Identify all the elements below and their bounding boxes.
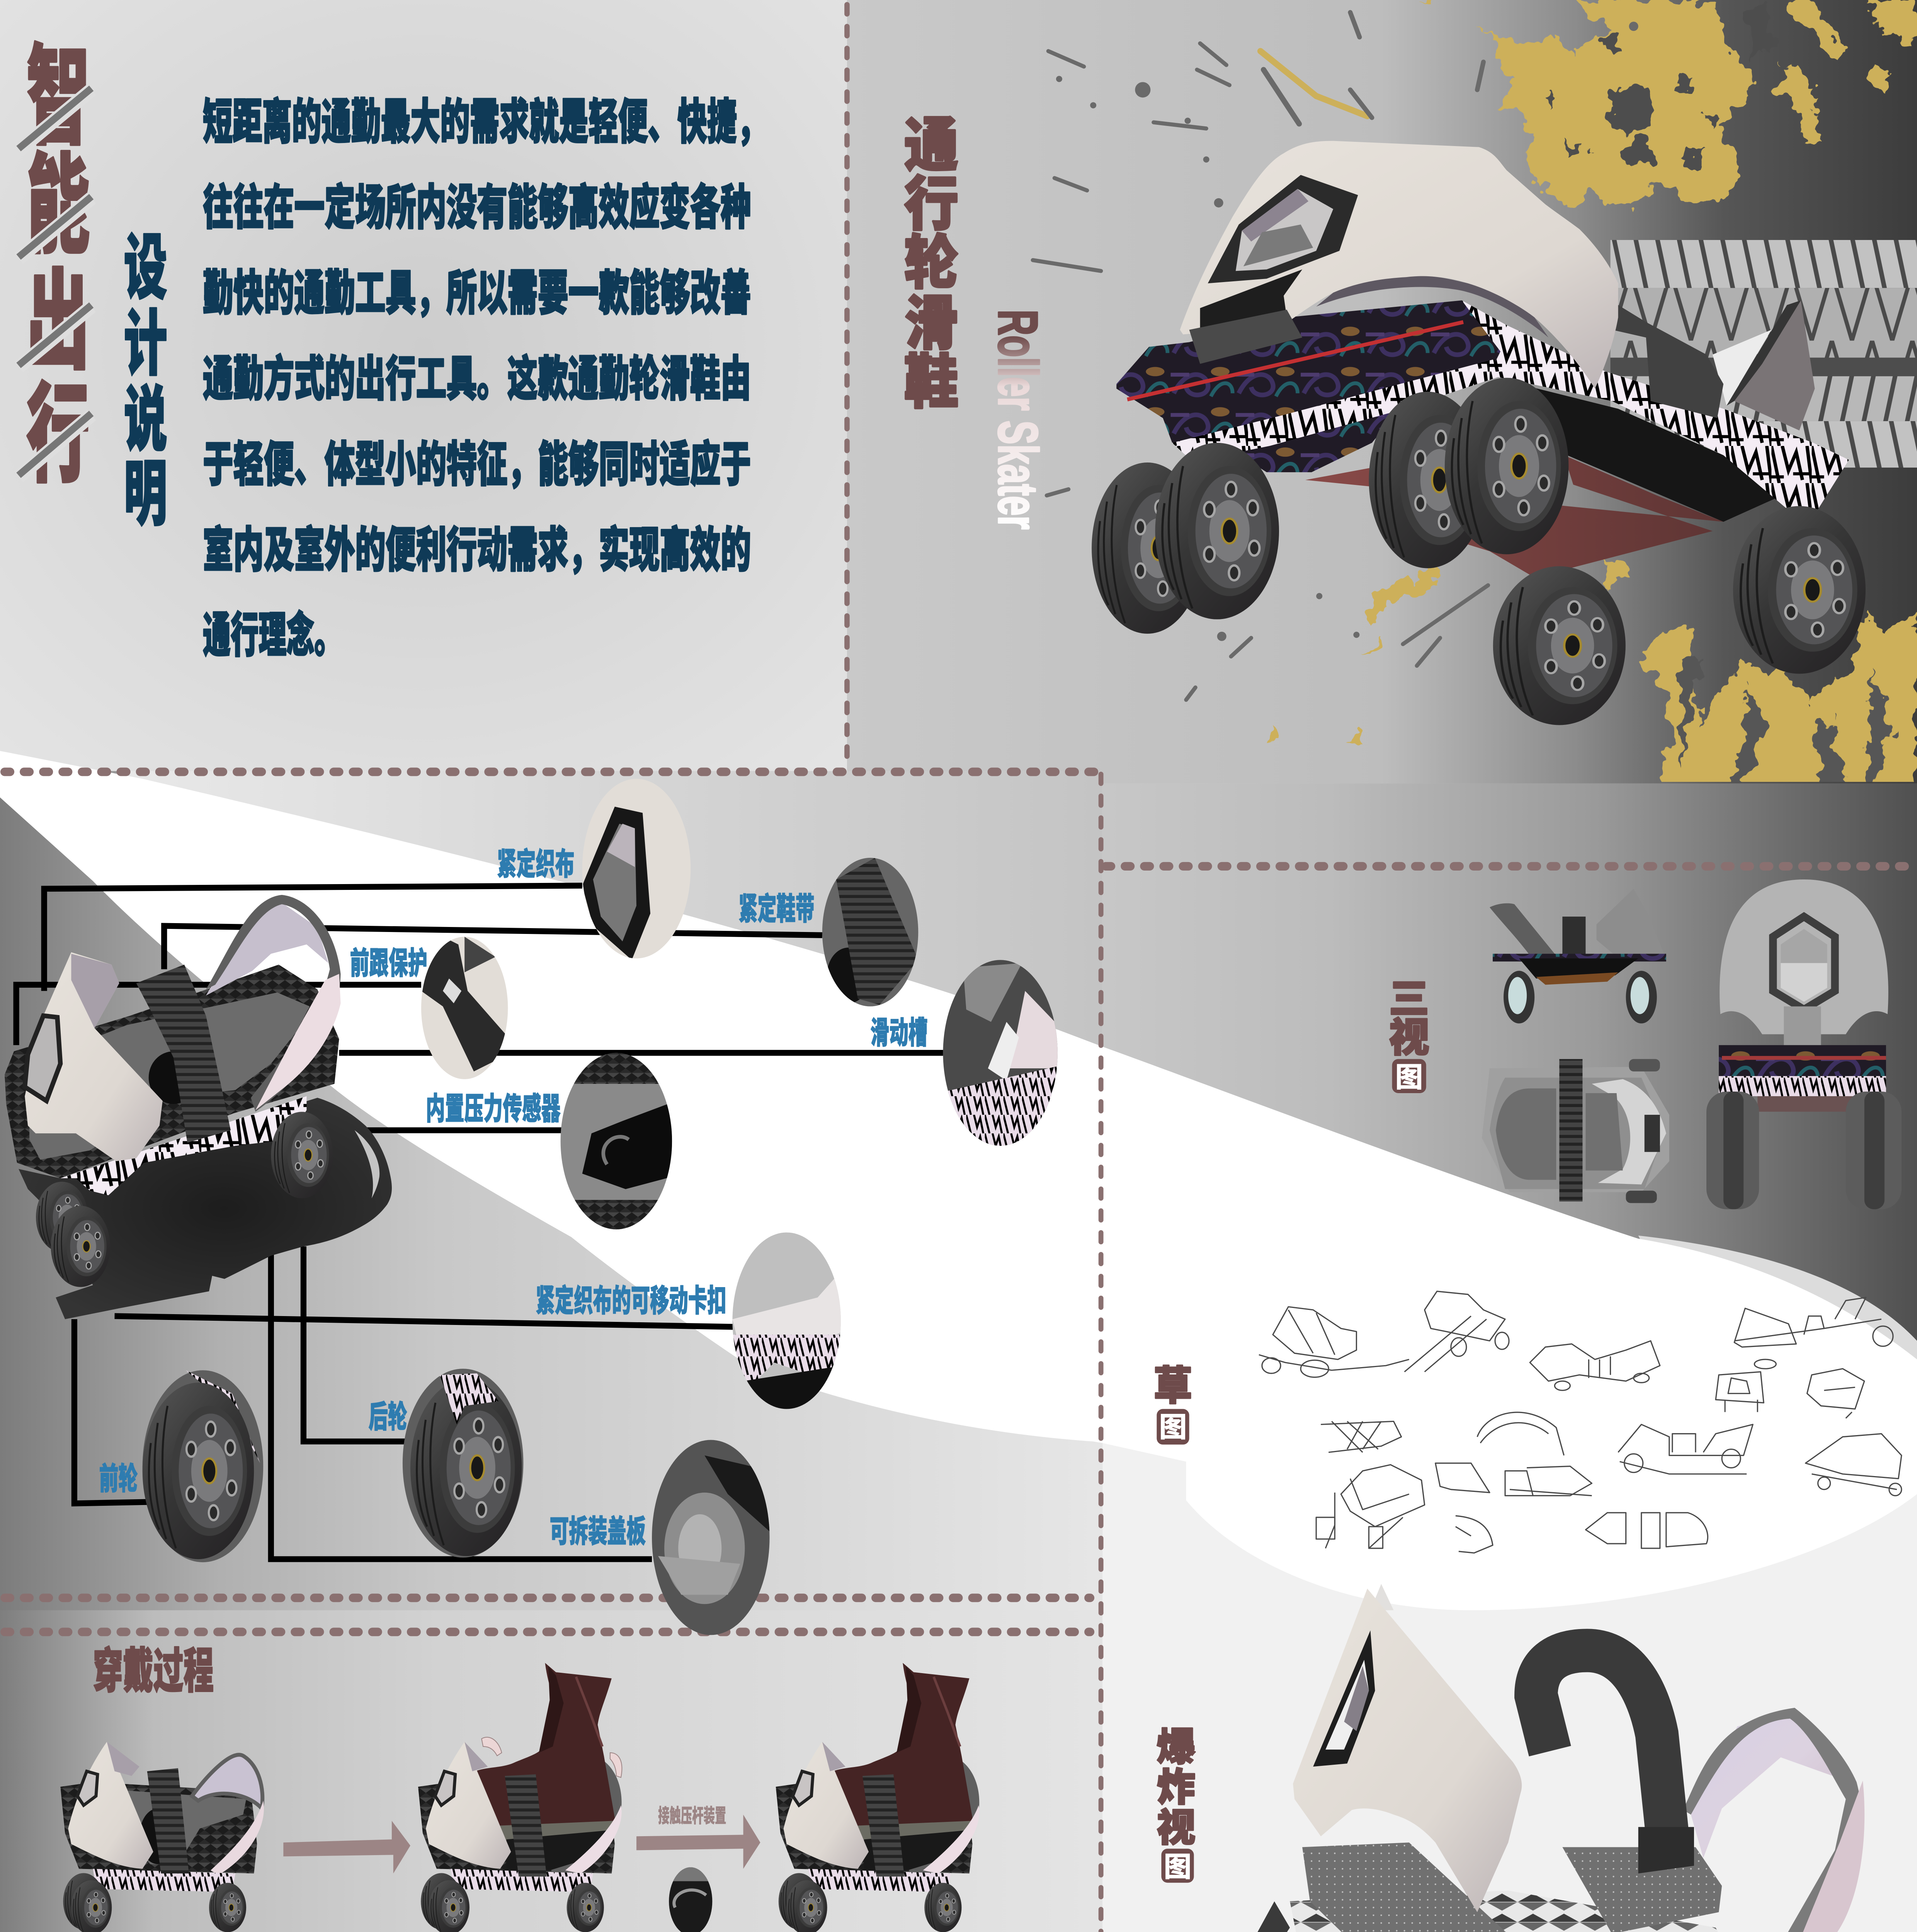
- panel: sketches: [1153, 1291, 1902, 1553]
- rear flap: [1713, 330, 1771, 406]
- rear band: [1691, 1713, 1846, 1858]
- detail: 滑动槽: [938, 957, 1062, 1149]
- deck underside: [1305, 455, 1723, 578]
- heading: 草图: 图: [1159, 1412, 1187, 1443]
- label: 前跟保护: 前跟保护: [350, 946, 427, 980]
- detail: 可拆装盖板: [650, 1437, 774, 1638]
- strap arch: [1536, 1650, 1669, 1853]
- label: 可拆装盖板: 可拆装盖板: [550, 1514, 646, 1549]
- fabric shell: [1180, 141, 1618, 389]
- colored lower layer: [1228, 409, 1400, 472]
- design description text block: 通勤方式的出行工具。这款通勤轮滑鞋由: [203, 352, 751, 406]
- detail: 前轮: [143, 1370, 263, 1562]
- detail: 后轮: [403, 1369, 523, 1558]
- design description text block: 通行理念。: [203, 609, 342, 662]
- subtitle: 设计说明: [124, 228, 167, 534]
- heading: 草图: [1153, 1364, 1192, 1445]
- product title: 通行轮滑鞋: 行: [904, 172, 958, 237]
- design description text block: 室内及室外的便利行动需求，实现高效的: [203, 524, 751, 577]
- main title: 智能出行: 行: [26, 374, 90, 495]
- label: 内置压力传感器: 内置压力传感器: [426, 1091, 561, 1126]
- panel: component breakdown: [5, 774, 1062, 1638]
- design description text block: 于轻便、体型小的特征，能够同时适应于: [203, 438, 751, 492]
- main title: 智能出行: 出: [26, 262, 90, 383]
- main title: 智能出行: 智: [26, 37, 90, 158]
- detail: 紧定织布的可移动卡扣: [728, 1231, 845, 1413]
- heading: 爆炸视图: [1157, 1726, 1196, 1883]
- top view: [1482, 1059, 1669, 1203]
- product title: 通行轮滑鞋: 轮: [904, 230, 958, 296]
- design description text block: 往往在一定场所内没有能够高效应变各种: [203, 181, 751, 235]
- label: 紧定鞋带: 紧定鞋带: [738, 891, 815, 926]
- heading: 三视图: 三: [1389, 977, 1429, 1022]
- yellow splatter top: [1425, 0, 1917, 207]
- step 1: open skate: [60, 1742, 264, 1932]
- product title: 通行轮滑鞋: 通: [904, 113, 958, 179]
- heading: 三视图: 视: [1389, 1015, 1429, 1060]
- main title: 智能出行: [19, 37, 91, 495]
- pencil sketches: [1259, 1291, 1902, 1553]
- arrow 1: [283, 1821, 410, 1873]
- detail: 紧定织布: [573, 774, 697, 966]
- heading: 爆炸视图: 炸: [1157, 1766, 1196, 1809]
- tire tracks: [1611, 240, 1917, 468]
- heading: 三视图: 图: [1395, 1062, 1423, 1093]
- front clip: [1200, 269, 1302, 338]
- heading: 穿戴过程: 穿戴过程: [93, 1645, 214, 1698]
- heading: 爆炸视图: 爆: [1157, 1726, 1196, 1769]
- label: 紧定织布: 紧定织布: [497, 847, 575, 881]
- detail: 内置压力传感器: [558, 1050, 675, 1233]
- panel: exploded view: [1157, 1588, 1917, 1932]
- shell window: [1313, 1630, 1375, 1767]
- insole pads: [1302, 1842, 1513, 1932]
- heading: 草图: 草: [1153, 1364, 1192, 1408]
- side view: [1490, 889, 1666, 1024]
- step 3: secured skate: [776, 1663, 979, 1932]
- label: 接触压杆装置: 接触压杆装置: [658, 1805, 726, 1827]
- subtitle: 设计说明: 明: [124, 454, 167, 534]
- design description text block: [203, 96, 767, 662]
- label: 前轮: 前轮: [99, 1461, 138, 1496]
- heading: 爆炸视图: 视: [1157, 1806, 1196, 1849]
- product title: 通行轮滑鞋: 鞋: [904, 350, 958, 415]
- heading: 爆炸视图: 图: [1163, 1852, 1192, 1883]
- deck: [1290, 1891, 1753, 1932]
- shadow crescent: [355, 1130, 379, 1198]
- small splatter marks: [1033, 12, 1488, 700]
- detail: 紧定鞋带: [818, 855, 923, 1010]
- label: 后轮: 后轮: [369, 1399, 407, 1434]
- fabric shell: [1293, 1588, 1522, 1912]
- product title: 通行轮滑鞋: [904, 113, 958, 415]
- product title: 通行轮滑鞋: 滑: [904, 291, 958, 357]
- label: 紧定织布的可移动卡扣: 紧定织布的可移动卡扣: [536, 1283, 726, 1318]
- panel: three views: [1389, 879, 1902, 1209]
- main title: 智能出行: 能: [26, 145, 90, 266]
- step 2: boot in skate: [418, 1663, 622, 1932]
- skate shadow: [19, 1098, 392, 1319]
- product subtitle: Roller Skater: Roller Skater: [987, 310, 1050, 529]
- subtitle: 设计说明: 计: [124, 304, 167, 384]
- colorful front deck: [1116, 300, 1500, 443]
- front view: [1706, 879, 1902, 1209]
- sensor detail: [666, 1866, 715, 1932]
- design description text block: 勤快的通勤工具，所以需要一款能够改善: [203, 267, 751, 320]
- yellow splatter bottom: [1267, 558, 1917, 805]
- clip: [1248, 1901, 1290, 1932]
- dark splatter holes: [1548, 0, 1774, 170]
- graffiti side panel: [1462, 300, 1849, 514]
- wheels: [1092, 463, 1203, 634]
- label: 滑动槽: 滑动槽: [870, 1015, 927, 1050]
- panel: wearing process: [60, 1645, 979, 1932]
- design description text block: 短距离的通勤最大的需求就是轻便、快捷，: [203, 96, 767, 149]
- arrow 2: [636, 1815, 760, 1869]
- heading: 三视图: [1389, 977, 1429, 1093]
- shell window: [1208, 175, 1358, 283]
- rotation hints: [481, 1737, 622, 1777]
- open skate main view: [5, 895, 341, 1287]
- detail: 前跟保护: [418, 934, 511, 1082]
- connector lines: [16, 886, 943, 1559]
- subtitle: 设计说明: 设: [124, 228, 167, 308]
- subtitle: 设计说明: 说: [124, 380, 167, 460]
- hero illustration: splatter, tire track and skate: [1033, 0, 1917, 805]
- black lower panel: [1500, 379, 1785, 522]
